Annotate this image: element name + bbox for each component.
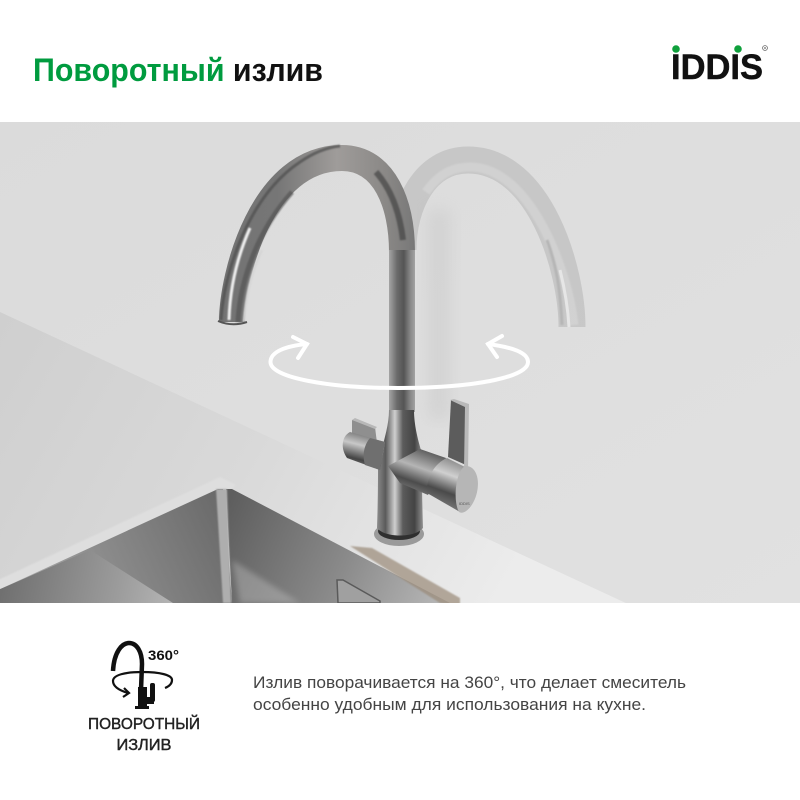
icon caption: ПОВОРОТНЫЙ — [88, 715, 200, 733]
photo: faucet in kitchen — [0, 122, 800, 606]
logo: IDDIS: IDDIS — [671, 48, 763, 87]
faucet spout — [218, 146, 403, 324]
faucet shadow on wall — [432, 218, 446, 414]
countertop — [0, 312, 630, 605]
icon rotation arrow — [113, 672, 172, 697]
icon body — [135, 683, 155, 709]
description text: особенно удобным для использования на кухне. — [253, 695, 646, 714]
icon caption: ИЗЛИВ — [116, 737, 172, 754]
rotation arrow — [270, 336, 528, 388]
sink — [0, 489, 450, 603]
reflection on counter — [350, 546, 460, 606]
description text: Излив поворачивается на 360°, что делает смеситель — [253, 673, 686, 692]
wall — [0, 122, 800, 603]
brand mark: IDDIS — [459, 501, 470, 506]
icon caption — [88, 715, 200, 754]
title: Поворотный излив — [33, 52, 323, 88]
handle drum — [427, 458, 478, 513]
faucet base plate — [374, 528, 424, 546]
faucet stem — [389, 250, 415, 412]
cross cylinder — [388, 449, 446, 495]
description text — [253, 673, 686, 714]
right lever — [448, 399, 469, 470]
left knob — [343, 418, 385, 470]
sink edge highlight — [0, 530, 110, 589]
icon label 360: 360° — [148, 647, 179, 663]
ghost spout — [403, 160, 574, 327]
faucet body — [377, 410, 423, 536]
icon: rotating spout 360 — [113, 643, 179, 709]
